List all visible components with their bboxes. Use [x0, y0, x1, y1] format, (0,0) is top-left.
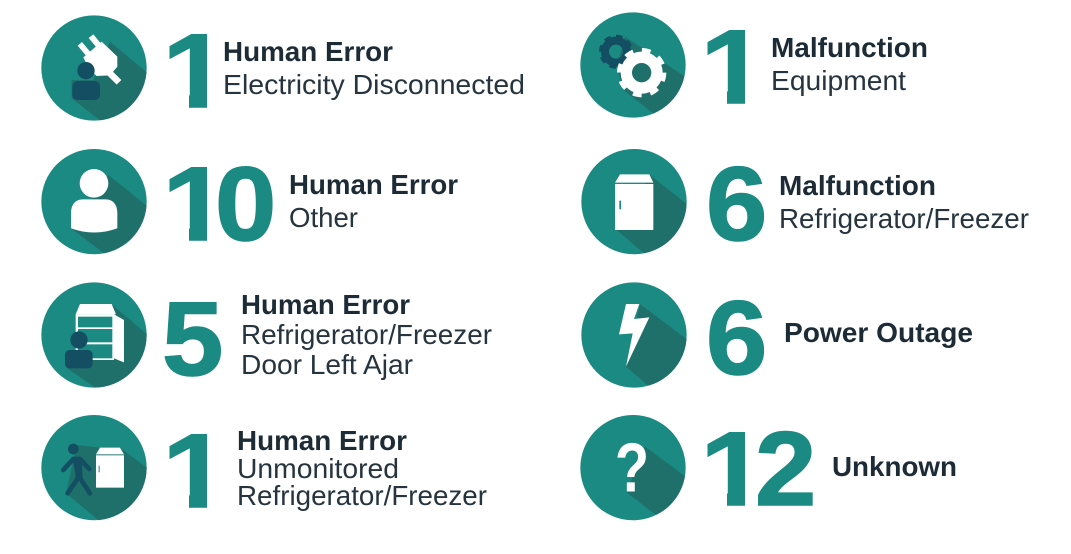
number: 1: 1 [700, 9, 768, 126]
panel: unknown [580, 415, 956, 520]
text: malfunction equipment: Equipment [771, 65, 906, 96]
icon: person walking away from refrigerator [41, 415, 150, 528]
number: 6: 6 [706, 279, 767, 396]
text: human error door left ajar: Human Error [241, 289, 410, 320]
text: human error electricity disconnected: Electricity Disconnected [223, 69, 525, 100]
number: 12: 2 [755, 410, 816, 527]
text: human error electricity disconnected: Human Error [223, 36, 393, 67]
panel: human error, electricity disconnected [41, 15, 524, 121]
text: human error unmonitored: Human Error [237, 425, 407, 456]
text: malfunction refrigerator: Malfunction [779, 170, 936, 201]
number: 10: 1 [162, 146, 230, 263]
icon: refrigerator [581, 149, 690, 263]
text: malfunction refrigerator [779, 170, 1029, 234]
panel: human error, unmonitored [41, 413, 487, 530]
icon: open refrigerator and person [41, 282, 147, 388]
text: power outage: Power Outage [784, 317, 973, 348]
text: human error door left ajar [241, 289, 492, 380]
icon: question mark [580, 415, 686, 520]
text: human error unmonitored [237, 425, 487, 511]
icon: gears [580, 12, 690, 120]
icon: question mark: ? [615, 430, 649, 507]
text: human error unmonitored: Unmonitored [237, 453, 399, 484]
number: 1: 1 [162, 413, 230, 530]
text: human error door left ajar: Refrigerator/Freezer [241, 319, 492, 350]
number: 6: 6 [706, 145, 767, 262]
text: malfunction equipment [771, 32, 928, 96]
panel: human error, door left ajar [41, 282, 492, 388]
icon: person [41, 149, 150, 263]
number: 1: 1 [162, 13, 230, 130]
text: human error other: Human Error [289, 169, 458, 200]
number: 10: 0 [215, 145, 276, 262]
panel: malfunction, refrigerator [581, 149, 1029, 254]
text: malfunction refrigerator: Refrigerator/Freezer [779, 203, 1029, 234]
panel: human error, other [41, 149, 458, 254]
text: human error other [289, 169, 458, 233]
icon: plug and person [41, 15, 147, 121]
number: 12: 1 [700, 411, 768, 528]
panel: power outage [581, 279, 973, 396]
text: human error unmonitored: Refrigerator/Freezer [237, 480, 487, 511]
text: human error other: Other [289, 202, 358, 233]
text: unknown: Unknown [832, 451, 957, 482]
text: malfunction equipment: Malfunction [771, 32, 928, 63]
number: 5: 5 [162, 280, 223, 397]
text: human error electricity disconnected [223, 36, 525, 100]
number: 10 [170, 166, 273, 242]
icon: lightning bolt [581, 282, 690, 395]
number: 12 [708, 430, 813, 506]
text: human error door left ajar: Door Left Ajar [241, 349, 413, 380]
panel: malfunction, equipment [580, 9, 928, 126]
